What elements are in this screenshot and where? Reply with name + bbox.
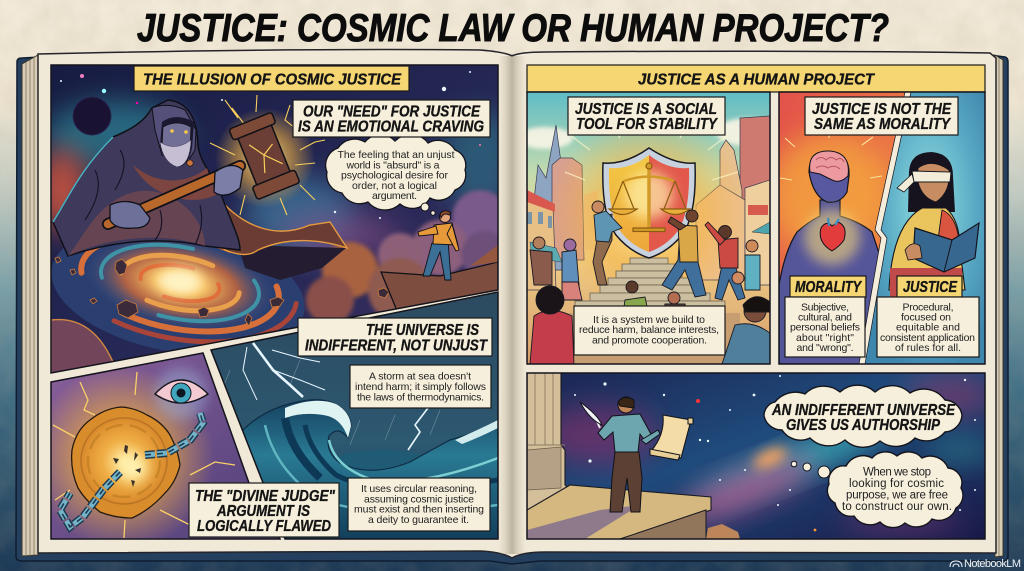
thought cloud: indifferent universe gives us authorship: AN INDIFFERENT UNIVERSE — [771, 402, 956, 419]
caption: justice is a social tool: JUSTICE IS A SOCIAL — [575, 101, 717, 118]
caption: justice is a social tool: TOOL FOR STABILITY — [576, 116, 718, 133]
caption: divine judge argument: ARGUMENT IS — [216, 503, 310, 520]
title: JUSTICE: COSMIC LAW OR HUMAN PROJECT? — [137, 7, 889, 50]
illustration: storm at sea — [205, 290, 500, 542]
text box: circular reasoning — [348, 478, 490, 531]
heading band: justice as a human project: JUSTICE AS A HUMAN PROJECT — [638, 72, 875, 88]
chain — [60, 472, 120, 527]
caption: divine judge argument — [189, 483, 339, 537]
panel divider outline top scene — [51, 65, 498, 373]
thought bubble: psychological desire: psychological desire for — [341, 170, 448, 182]
illustration: blindfolded justice figure — [860, 92, 986, 364]
caption: our need for justice: IS AN EMOTIONAL CRAVING — [298, 118, 484, 136]
caption: divine judge argument: THE "DIVINE JUDGE" — [195, 488, 335, 505]
galaxy — [52, 242, 304, 351]
caption: not the same as morality — [805, 97, 958, 135]
thought bubble: psychological desire: order, not a logical — [352, 180, 437, 192]
text box: system we build: and promote cooperation. — [592, 334, 707, 346]
text box: storm at sea: intend harm; it simply follows — [355, 381, 486, 393]
thought bubble: psychological desire: argument. — [372, 190, 417, 202]
label and text: justice — [877, 276, 979, 357]
clouds right — [306, 190, 509, 324]
thought cloud: construct our own: When we stop — [863, 466, 931, 478]
label and text: justice: equitable and — [896, 322, 960, 334]
text box: circular reasoning: must exist and then inserting — [354, 504, 484, 516]
foreground people — [530, 310, 574, 364]
label and text: morality: cultural, and — [798, 312, 852, 324]
illustration: building justice shield in the city — [517, 92, 780, 365]
pillar — [528, 374, 567, 509]
caption: not the same as morality: SAME AS MORALITY — [814, 116, 951, 133]
thought cloud: construct our own — [791, 452, 963, 528]
jagged divider between morality and justice — [859, 92, 911, 364]
text box: storm at sea: A storm at sea doesn't — [369, 370, 471, 382]
wave — [240, 400, 498, 539]
shield — [603, 148, 695, 258]
label and text: justice: focused on — [901, 312, 951, 324]
hood & face — [152, 105, 196, 158]
fists — [110, 202, 150, 228]
cloak — [53, 100, 240, 256]
caption: universe is indifferent — [298, 318, 492, 356]
gavel handle — [108, 166, 240, 224]
label and text: justice: JUSTICE — [903, 279, 958, 296]
thought cloud: indifferent universe gives us authorship: GIVES US AUTHORSHIP — [786, 417, 940, 434]
panel: illusion of cosmic justice, left page — [50, 64, 499, 540]
label and text: morality: MORALITY — [795, 279, 862, 296]
text box: system we build: reduce harm, balance interests, — [579, 324, 719, 336]
label and text: justice: of rules for all. — [895, 342, 961, 354]
gavel lightning — [210, 95, 325, 215]
label and text: justice: Procedural, — [902, 302, 954, 314]
caption: divine judge argument: LOGICALLY FLAWED — [197, 518, 331, 535]
label and text: justice: consistent application — [880, 332, 975, 344]
label and text: morality: about "right" — [796, 332, 854, 344]
foreground boulder — [51, 320, 113, 375]
illustration: morality figure, brain and heart — [780, 92, 904, 364]
thought bubble: psychological desire — [326, 134, 466, 215]
illustration: broken seal and all-seeing eye — [52, 354, 279, 538]
dark planet — [73, 97, 111, 135]
stars — [60, 71, 481, 219]
eye — [155, 368, 207, 420]
logo: NotebookLM: NotebookLM — [964, 558, 1021, 570]
label and text: morality — [785, 276, 866, 357]
gavel head — [229, 112, 300, 200]
scales — [609, 163, 690, 232]
thought cloud: construct our own: to construct our own. — [842, 501, 952, 513]
caption: our need for justice: OUR "NEED" FOR JUSTICE — [303, 104, 481, 120]
illustration: author before the cosmos — [527, 373, 995, 539]
ledge — [527, 485, 711, 539]
thought bubble: psychological desire: The feeling that an unjust — [338, 149, 455, 161]
thought cloud: indifferent universe gives us authorship — [764, 385, 962, 447]
seal shards — [113, 445, 141, 487]
thought cloud: construct our own: purpose, we are free — [846, 490, 948, 502]
panel: justice as a human project, right page — [517, 65, 995, 539]
thought cloud: construct our own: looking for cosmic — [849, 478, 944, 490]
people lifting shield — [530, 201, 772, 364]
illustration: cosmic judge over galaxy — [36, 65, 520, 375]
steps — [574, 258, 726, 306]
caption: justice is a social tool — [568, 97, 725, 135]
text box: storm at sea: the laws of thermodynamics. — [357, 392, 484, 404]
caption: universe is indifferent: INDIFFERENT, NOT UNJUST — [305, 338, 488, 354]
city buildings — [534, 125, 562, 270]
text box: circular reasoning: assuming cosmic justice — [364, 494, 474, 506]
author figure — [580, 397, 693, 512]
far swell — [340, 450, 420, 468]
caption: our need for justice — [293, 100, 490, 137]
text box: circular reasoning: It uses circular reasoning, — [361, 483, 477, 495]
cliff — [380, 262, 498, 308]
text box: circular reasoning: a deity to guarantee it. — [368, 514, 469, 526]
text box: storm at sea — [350, 365, 491, 408]
label and text: morality: Subjective, — [801, 302, 849, 314]
label and text: morality: and "wrong". — [796, 342, 854, 354]
rocks — [55, 257, 389, 326]
label and text: morality: personal beliefs — [790, 322, 860, 334]
text box: system we build: It is a system we build to — [593, 314, 705, 326]
cloak trail — [238, 245, 346, 280]
thought bubble: psychological desire: world is "absurd" is a — [346, 160, 440, 172]
caption: universe is indifferent: THE UNIVERSE IS — [366, 322, 479, 339]
gavel glow — [215, 108, 315, 208]
figure on cliff — [418, 211, 459, 280]
heading band: justice as a human project — [527, 65, 985, 92]
caption: not the same as morality: JUSTICE IS NOT THE — [812, 101, 952, 118]
heading: the illusion of cosmic justice: THE ILLUSION OF COSMIC JUSTICE — [143, 72, 402, 88]
heading: the illusion of cosmic justice — [134, 66, 409, 91]
text box: system we build — [574, 306, 725, 355]
sunburst — [553, 136, 742, 290]
